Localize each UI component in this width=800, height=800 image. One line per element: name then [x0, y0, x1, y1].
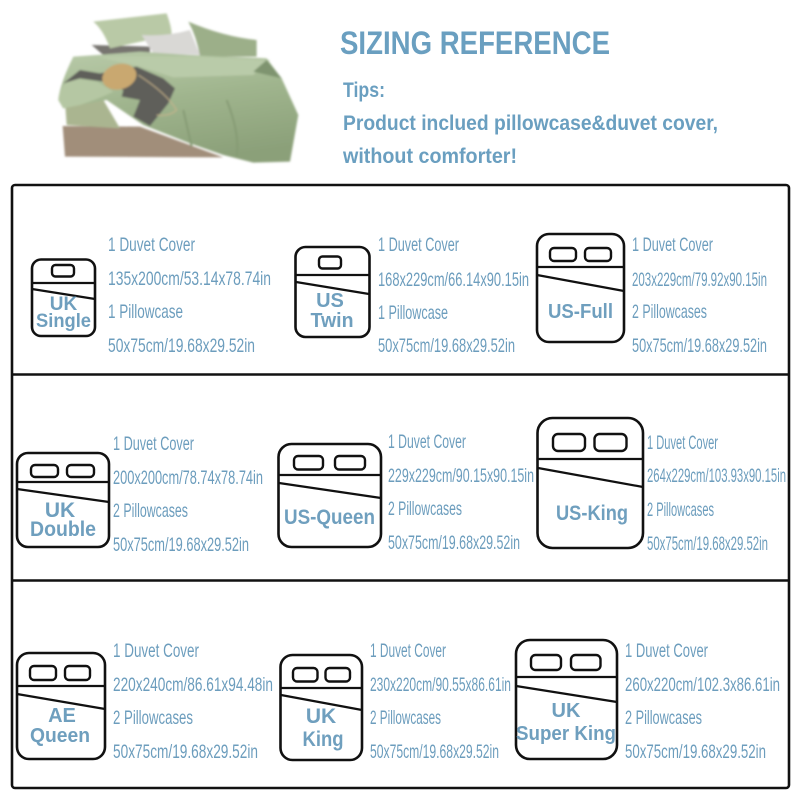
- tips text: Product inclued pillowcase&duvet cover,: [343, 112, 718, 135]
- text: UK Single sizes: [108, 234, 271, 357]
- icon: US-King bed: [538, 418, 643, 548]
- title: SIZING REFERENCE: [340, 25, 610, 61]
- row 1: UK Single: [32, 234, 271, 357]
- row 3: UK King: [280, 640, 511, 763]
- text: UK Double sizes: 200x200cm/78.74x78.74in: [113, 467, 263, 489]
- text: UK Single sizes: 1 Pillowcase: [108, 301, 183, 323]
- text: UK Double sizes: [113, 433, 263, 556]
- text: US-Full sizes: 1 Duvet Cover: [632, 234, 713, 256]
- icon: UK Single bed: UK: [50, 294, 77, 315]
- text: US-King sizes: 2 Pillowcases: [647, 499, 714, 521]
- text: US-Full sizes: [632, 234, 767, 357]
- text: UK Super King sizes: 2 Pillowcases: [625, 707, 702, 729]
- text: US Twin sizes: 1 Duvet Cover: [378, 234, 459, 256]
- text: US-Queen sizes: 229x229cm/90.15x90.15in: [388, 465, 534, 487]
- row 3: AE Queen: [17, 640, 273, 763]
- text: US-King sizes: [647, 432, 786, 555]
- text: UK King sizes: [370, 640, 511, 763]
- icon: UK Super King bed: Super King: [516, 723, 616, 745]
- text: UK Double sizes: 2 Pillowcases: [113, 500, 188, 522]
- icon: UK Super King bed: [516, 640, 617, 759]
- text: AE Queen sizes: 2 Pillowcases: [113, 707, 193, 729]
- text: US-Queen sizes: 1 Duvet Cover: [388, 431, 466, 453]
- icon: UK Double bed: Double: [30, 518, 96, 541]
- text: UK King sizes: 1 Duvet Cover: [370, 640, 446, 662]
- tips text: without comforter!: [342, 145, 517, 168]
- text: UK Double sizes: 50x75cm/19.68x29.52in: [113, 534, 249, 556]
- tips text: [342, 79, 718, 168]
- text: UK Super King sizes: [625, 640, 780, 763]
- icon: UK Super King bed: UK: [552, 700, 581, 722]
- row 1: US-Full: [537, 234, 767, 357]
- icon: AE Queen bed: Queen: [30, 725, 90, 747]
- icon: US-Full bed: [537, 234, 624, 342]
- text: AE Queen sizes: [113, 640, 273, 763]
- icon: UK Double bed: [17, 453, 109, 547]
- product photo: green bedding: [58, 13, 298, 163]
- icon: US Twin bed: Twin: [310, 310, 354, 332]
- text: UK Double sizes: 1 Duvet Cover: [113, 433, 194, 455]
- icon: US-Queen bed: [278, 444, 381, 547]
- text: US-Queen sizes: 2 Pillowcases: [388, 498, 462, 520]
- text: UK Super King sizes: 1 Duvet Cover: [625, 640, 708, 662]
- text: US-Full sizes: 2 Pillowcases: [632, 301, 707, 323]
- row 1: US Twin: [296, 234, 529, 357]
- text: UK Single sizes: 135x200cm/53.14x78.74in: [108, 268, 271, 290]
- icon: AE Queen bed: AE: [48, 705, 76, 727]
- text: UK King sizes: 2 Pillowcases: [370, 707, 441, 729]
- icon: UK King bed: King: [302, 728, 344, 751]
- text: UK King sizes: 230x220cm/90.55x86.61in: [370, 674, 511, 696]
- text: US Twin sizes: 1 Pillowcase: [378, 302, 448, 324]
- icon: US Twin bed: [296, 247, 370, 337]
- text: UK Single sizes: 1 Duvet Cover: [108, 234, 195, 256]
- icon: US-Queen bed: US-Queen: [284, 506, 375, 529]
- text: US Twin sizes: 168x229cm/66.14x90.15in: [378, 269, 529, 291]
- text: AE Queen sizes: 50x75cm/19.68x29.52in: [113, 741, 258, 763]
- icon: UK Double bed: UK: [45, 499, 75, 522]
- row 3: UK Super King: [516, 640, 780, 763]
- text: UK Single sizes: 50x75cm/19.68x29.52in: [108, 335, 255, 357]
- icon: US-King bed: US-King: [556, 502, 628, 525]
- icon: UK Single bed: [32, 260, 95, 336]
- icon: UK King bed: [280, 655, 362, 760]
- text: US-Queen sizes: 50x75cm/19.68x29.52in: [388, 532, 520, 554]
- icon: US-Full bed: US-Full: [548, 301, 613, 323]
- text: AE Queen sizes: 1 Duvet Cover: [113, 640, 199, 662]
- text: AE Queen sizes: 220x240cm/86.61x94.48in: [113, 674, 273, 696]
- text: UK King sizes: 50x75cm/19.68x29.52in: [370, 741, 499, 763]
- row 2: US-King: [538, 418, 786, 555]
- row 2: US-Queen: [278, 431, 534, 554]
- tips text: Tips:: [343, 79, 385, 102]
- text: US Twin sizes: 50x75cm/19.68x29.52in: [378, 335, 515, 357]
- sizing table frame: [12, 185, 789, 788]
- icon: UK King bed: UK: [306, 705, 336, 728]
- text: US-Queen sizes: [388, 431, 534, 554]
- icon: UK Single bed: Single: [36, 311, 91, 332]
- text: US Twin sizes: [378, 234, 529, 357]
- icon: AE Queen bed: [17, 653, 105, 759]
- icon: US Twin bed: US: [316, 290, 344, 312]
- text: US-King sizes: 1 Duvet Cover: [647, 432, 718, 454]
- row 2: UK Double: [17, 433, 263, 556]
